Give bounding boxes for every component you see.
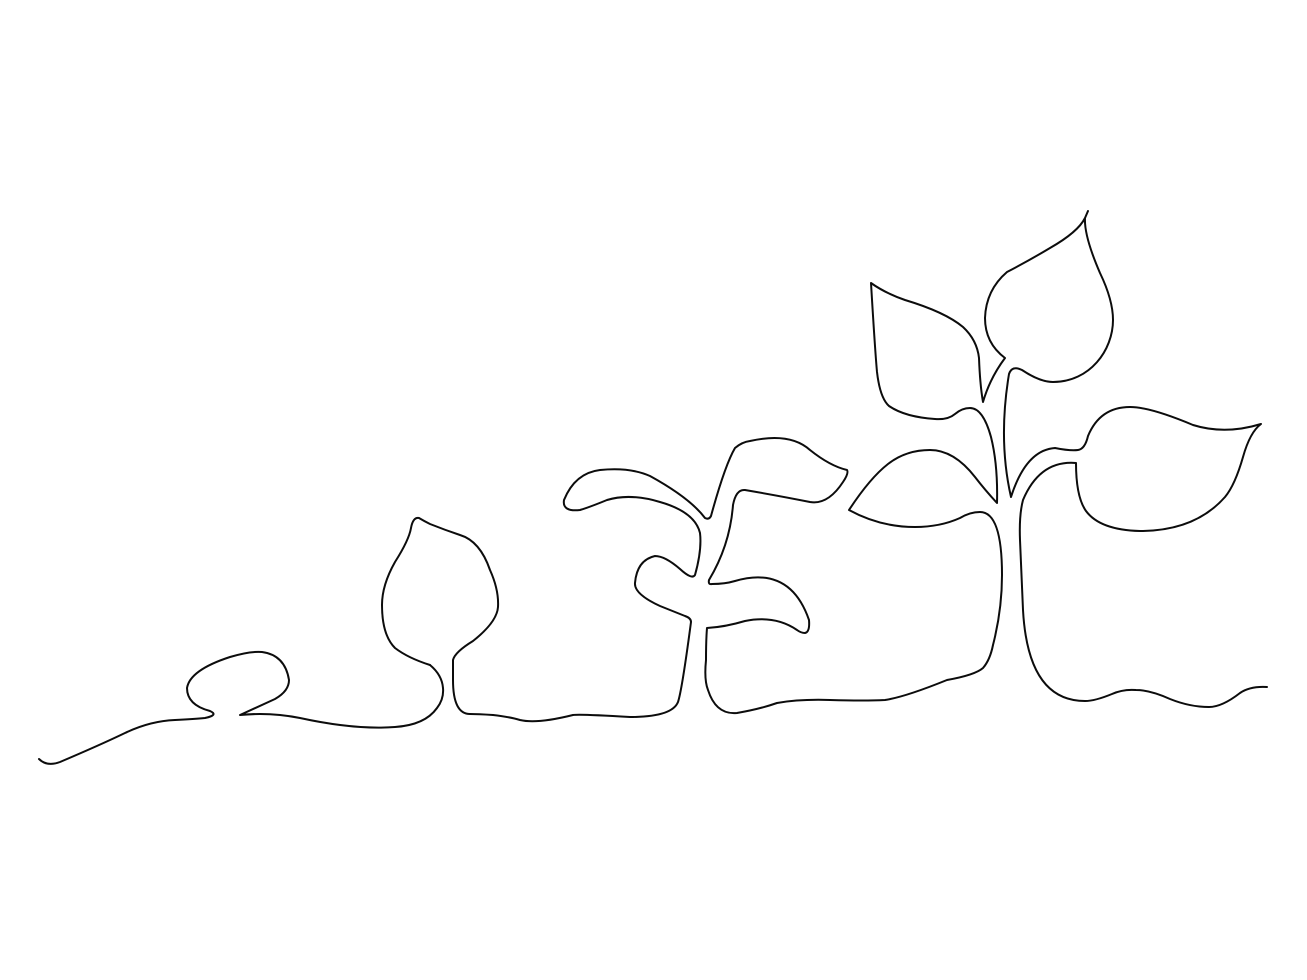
stage 4: grown plant with four large leaves — [830, 211, 1267, 707]
stage 3: seedling with four leaves — [493, 438, 848, 721]
stage 2: bud — [382, 518, 498, 715]
stage 1: seed on ground line — [39, 652, 443, 764]
